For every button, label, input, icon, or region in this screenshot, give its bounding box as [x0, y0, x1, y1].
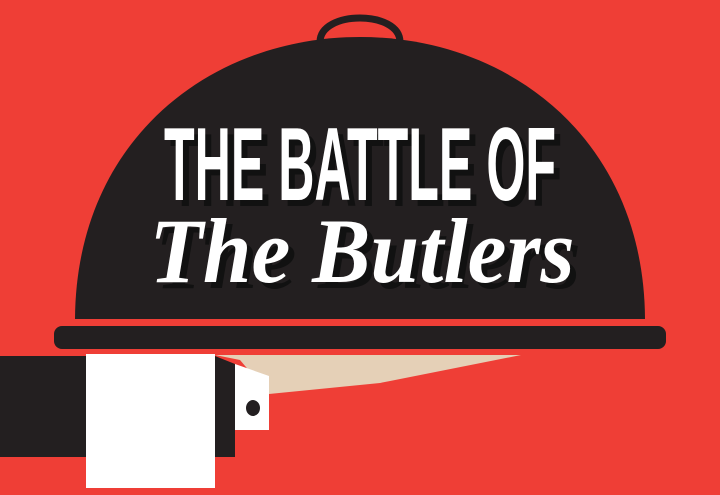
icon: cloche handle [320, 18, 400, 42]
tray [54, 326, 666, 349]
icon: cufflink [246, 400, 260, 416]
hand [215, 355, 521, 394]
title [150, 107, 580, 308]
title line 1 [164, 107, 562, 229]
title line 2: The Butlers [156, 206, 580, 308]
sleeve [0, 356, 235, 457]
cuff [235, 364, 269, 430]
title line 2: The Butlers [150, 200, 574, 302]
towel [86, 354, 215, 488]
cloche dome [75, 37, 645, 319]
